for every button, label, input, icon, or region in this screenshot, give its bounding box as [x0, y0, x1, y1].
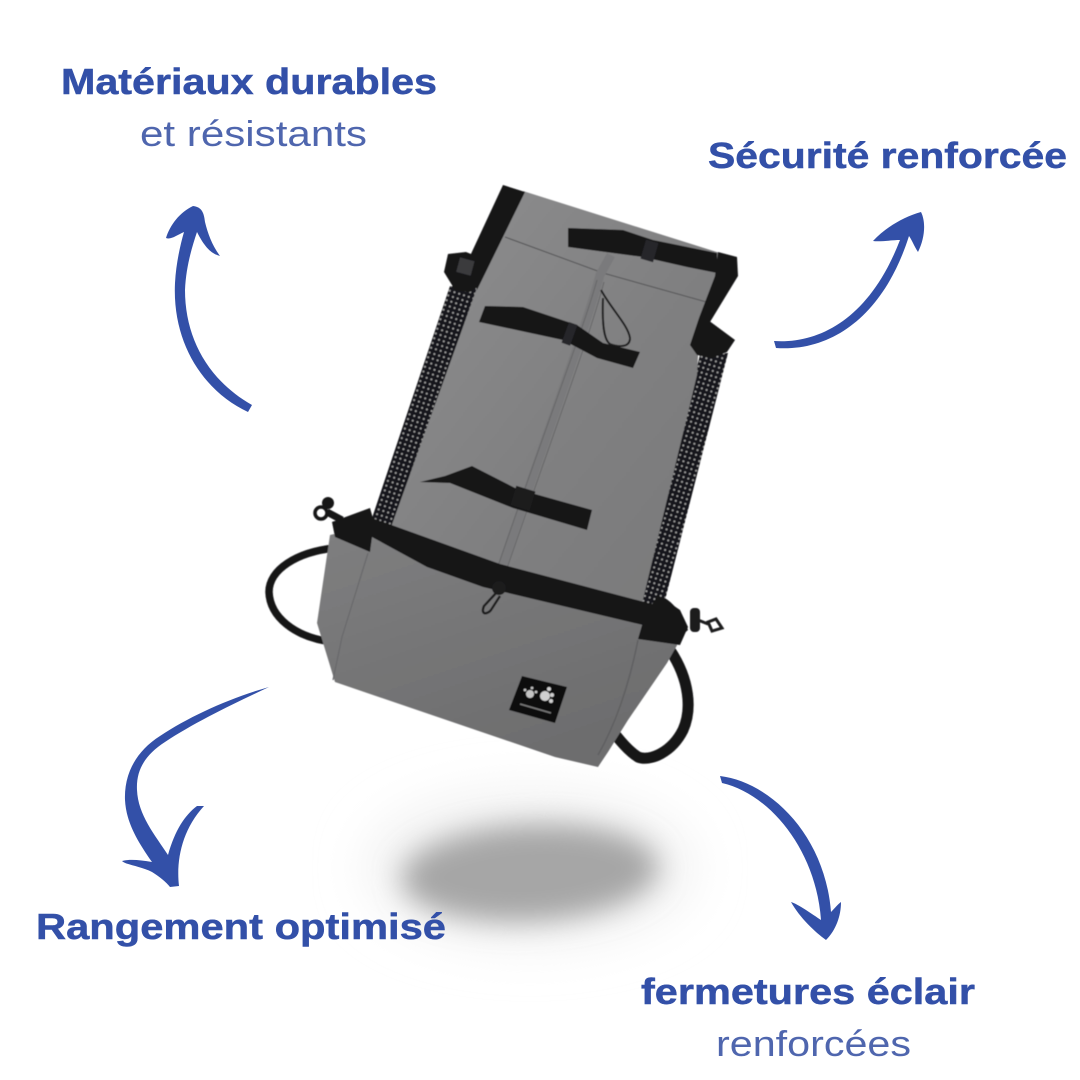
- left side buckle: [444, 252, 481, 292]
- heading: materials: [61, 61, 437, 154]
- zipper: [496, 255, 611, 574]
- floor shadow: [370, 796, 690, 940]
- left mesh pocket: [368, 285, 480, 532]
- right side buckle: [690, 318, 735, 358]
- left handle: [269, 548, 335, 641]
- right pocket rim: [638, 595, 688, 645]
- arrow: durable materials: [166, 206, 252, 412]
- arrow: security: [774, 212, 924, 348]
- right clip: [690, 608, 722, 632]
- heading: materials: Matériaux durables: [61, 61, 437, 102]
- left pocket rim: [332, 508, 374, 552]
- main body panel: [390, 191, 720, 612]
- right top binding: [699, 252, 738, 322]
- right mesh pocket: [634, 353, 728, 612]
- top strap and buckle: [568, 228, 717, 273]
- arrow: zippers: [720, 776, 841, 940]
- backpack photo: [269, 185, 738, 767]
- pocket zipper pull: [483, 581, 506, 613]
- left black binding: [470, 185, 525, 290]
- heading: materials: et résistants: [140, 113, 367, 154]
- brand label with paws: [509, 676, 567, 723]
- zipper pull: [601, 290, 630, 346]
- left drawcord: [315, 497, 342, 520]
- pocket left fold: [333, 553, 368, 680]
- heading: zippers: fermetures éclair: [641, 971, 975, 1012]
- arrow: storage: [122, 687, 269, 887]
- pocket right fold: [598, 640, 638, 755]
- heading: storage: Rangement optimisé: [36, 906, 446, 947]
- middle strap and buckle: [479, 306, 640, 368]
- right handle: [606, 650, 688, 758]
- front pocket rim: [372, 518, 652, 625]
- lower strap and buckle: [420, 466, 592, 530]
- heading: zippers: [641, 971, 975, 1064]
- heading: security: Sécurité renforcée: [708, 135, 1067, 176]
- right rim arch: [650, 594, 688, 640]
- front pocket: [317, 525, 680, 767]
- heading: zippers: renforcées: [716, 1023, 911, 1064]
- top seam: [505, 237, 710, 303]
